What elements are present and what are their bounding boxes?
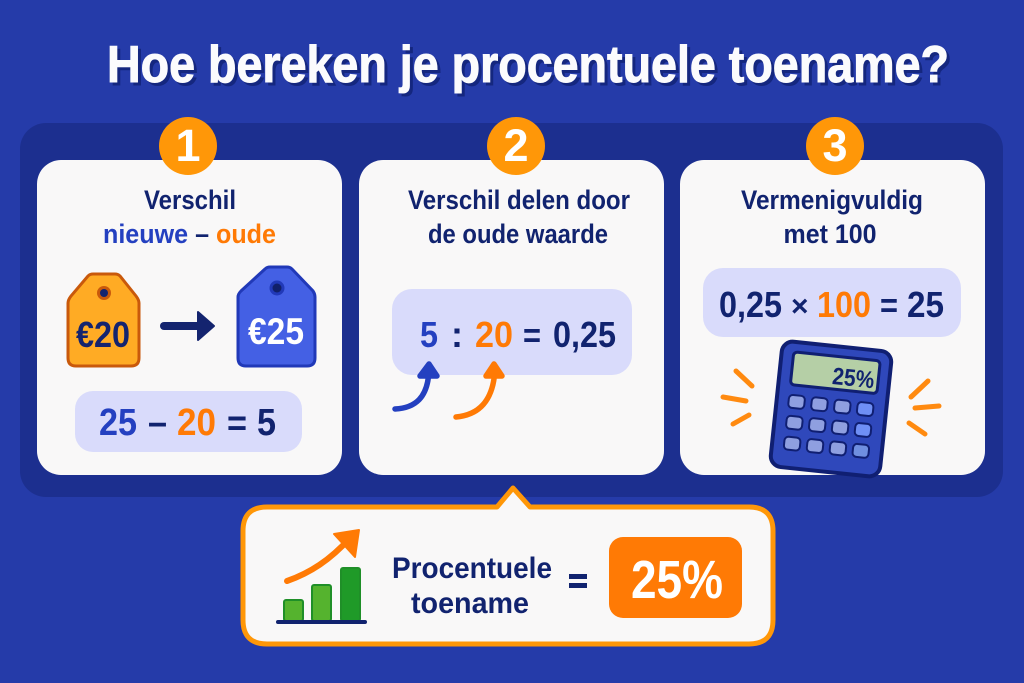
icon: blue price tag: €25 [248,311,304,352]
formula: 5 : 20 = 0,25: : [451,314,463,355]
heading: Verschil: Verschil [144,185,236,215]
subheading: nieuwe - oude: nieuwe – oude [103,219,276,249]
heading line 2: met 100 [784,219,876,249]
formula: 25 - 20 = 5: 5 [257,402,276,444]
formula: 5 : 20 = 0,25: 20 [475,314,513,355]
result box: 25%: 25% [631,550,723,610]
heading line 2: de oude waarde [428,219,608,249]
title: Hoe bereken je procentuele toename? [110,39,952,97]
icon: growth chart [278,530,365,622]
formula: 0,25 x 100 = 25: = [880,287,898,325]
formula: 0,25 x 100 = 25: 0,25 [719,284,782,325]
formula: 25 - 20 = 5: 25 [99,402,137,444]
label: Procentuele toename: toename [411,587,529,620]
formula: 5 : 20 = 0,25: 5 [420,314,438,355]
result box: 25% [609,537,742,618]
label: Procentuele toename [392,552,552,620]
formula: 25 - 20 = 5: – [148,402,167,444]
arrow head [198,312,214,340]
arrow: old to new [164,322,197,330]
formula: 5 : 20 = 0,25: = [523,317,541,355]
heading: step 3: Vermenigvuldig [741,185,923,215]
icon: calculator: 25% [831,363,876,394]
label: Procentuele toename: Procentuele [392,552,552,585]
formula: 5 : 20 = 0,25 [392,289,632,375]
panel: step 1 [37,117,342,475]
formula: 0,25 x 100 = 25: × [791,290,809,323]
formula: 25 - 20 = 5: 20 [177,402,216,444]
arrow: blue curved [395,364,437,409]
icon: calculator [770,341,892,477]
icon: orange sparks [723,371,939,434]
panel: step 2 [359,117,664,475]
formula: 0,25 x 100 = 25: 100 [817,284,871,325]
icon: orange price tag [68,274,139,366]
equals sign [569,574,587,588]
panel: step 3 [680,117,985,477]
panel: steps background [20,123,1003,497]
formula: 0,25 x 100 = 25 [703,268,961,337]
heading: step 2: Verschil delen door [408,185,630,215]
formula: 5 : 20 = 0,25: 0,25 [553,314,616,355]
arrow: orange curved [456,364,502,417]
step number 3: 3 [822,120,848,171]
step number 2: 2 [503,120,529,171]
step number 2 [487,117,545,175]
callout: result [243,488,773,644]
formula: 25 - 20 = 5: = [227,402,247,443]
step number 1: 1 [175,120,201,171]
step number 1 [159,117,217,175]
title: Hoe bereken je procentuele toename? [107,36,949,94]
icon: blue price tag [238,267,315,366]
formula: 25 - 20 = 5 [75,391,302,452]
formula: 0,25 x 100 = 25: 25 [907,284,944,325]
step number 3 [806,117,864,175]
icon: orange price tag: €20 [76,314,130,355]
